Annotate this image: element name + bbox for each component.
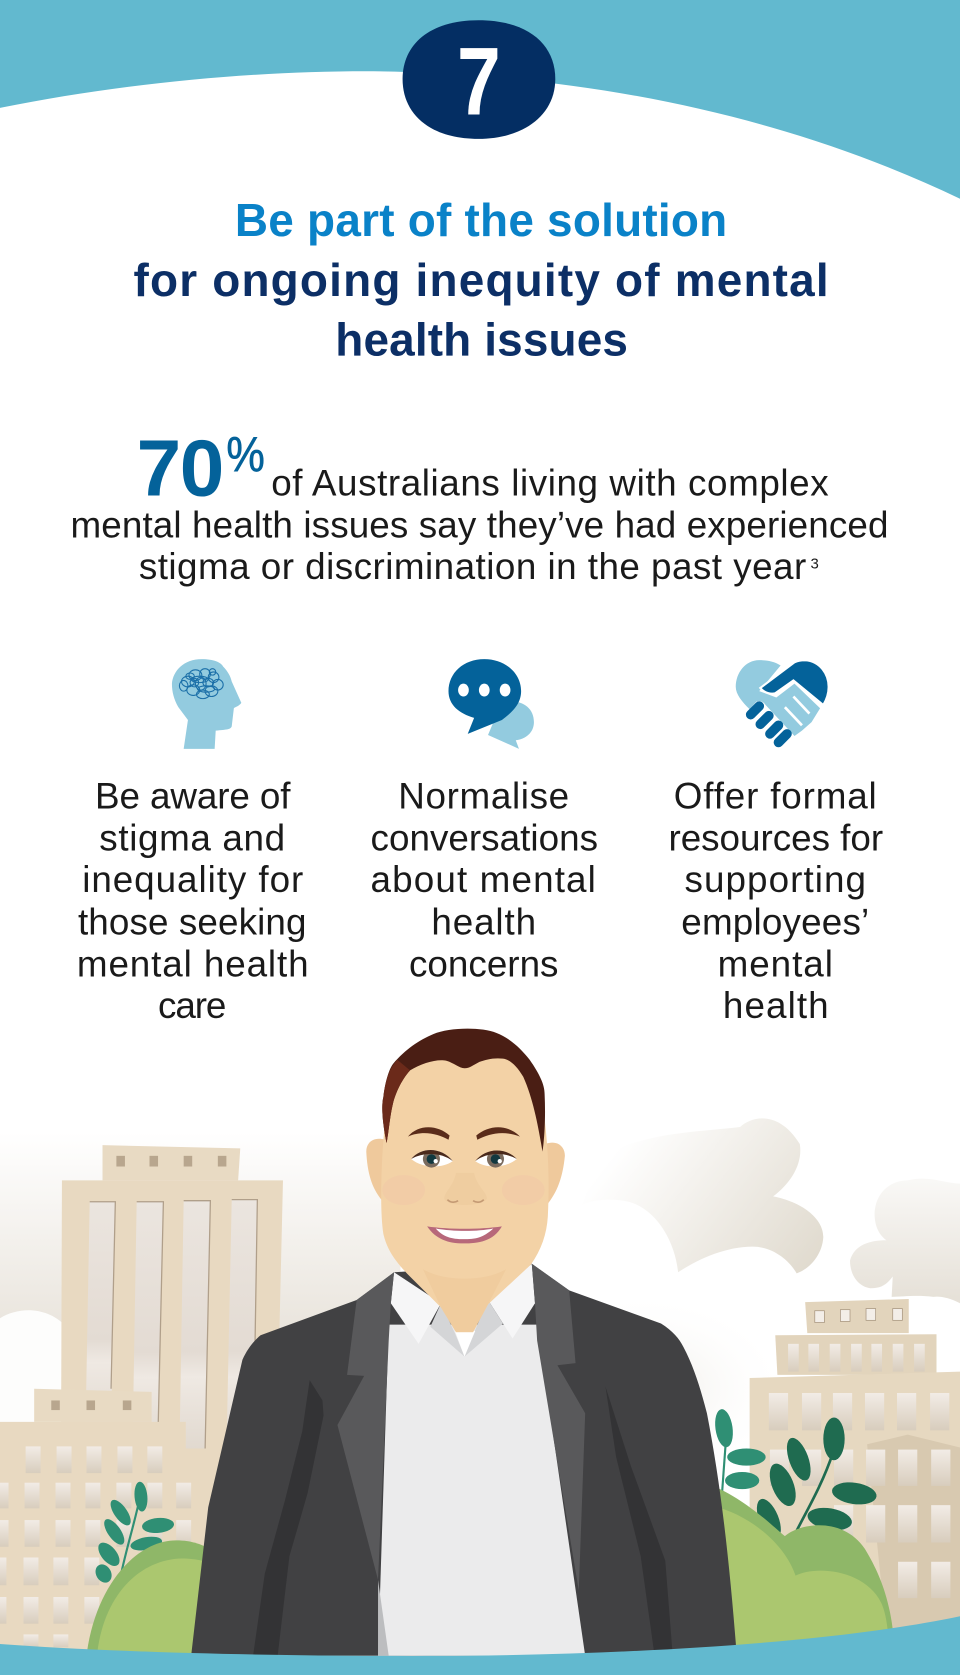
statistic: 70 percent: mental health issues say they’ve had experienced — [70, 504, 888, 545]
text: normalise conversations: Normalise — [398, 776, 569, 817]
chin shading — [423, 1269, 506, 1332]
cheek blush — [382, 1175, 425, 1205]
text: be aware of stigma: stigma and — [99, 817, 285, 858]
title: for ongoing inequity of mental — [133, 254, 829, 306]
building: tall left tower — [61, 1145, 283, 1496]
text: be aware of stigma: mental health — [77, 943, 309, 984]
top blue wave band — [0, 0, 960, 199]
collar shadow — [430, 1300, 503, 1357]
statistic: 70 percent: % — [226, 428, 265, 482]
hair — [382, 1029, 545, 1152]
text: offer formal resources: resources for — [668, 817, 883, 858]
text: be aware of stigma: those seeking — [78, 902, 306, 943]
nostrils — [447, 1200, 484, 1202]
text: normalise conversations: health — [431, 902, 536, 943]
text: normalise conversations — [371, 776, 598, 984]
eyebrows — [408, 1127, 520, 1140]
statistic: 70 percent: 70 — [137, 423, 224, 513]
statistic: 70 percent: stigma or discrimination in the past year — [139, 546, 806, 587]
shirt collar left — [391, 1272, 441, 1344]
building: right block — [750, 1299, 960, 1634]
statistic: 70 percent — [70, 423, 888, 587]
sweater — [378, 1325, 585, 1656]
right eye — [475, 1150, 517, 1168]
ears — [366, 1139, 565, 1205]
icon: speech bubbles — [448, 659, 534, 749]
shirt collar right — [488, 1264, 535, 1339]
right lapel — [532, 1264, 585, 1591]
text: be aware of stigma: care — [158, 985, 226, 1026]
face — [381, 1046, 549, 1332]
text: be aware of stigma — [77, 776, 309, 1026]
left eye — [411, 1150, 453, 1168]
statistic: 70 percent: 3 — [811, 555, 819, 572]
bottom blue wave band — [0, 1616, 960, 1675]
text: be aware of stigma: Be aware of — [95, 776, 291, 817]
icon: head with tangled brain — [172, 659, 241, 749]
sweater shade — [378, 1580, 389, 1656]
person: man in jacket — [191, 1029, 737, 1656]
nose — [444, 1173, 487, 1205]
number badge 7 — [403, 20, 555, 139]
text: offer formal resources: mental — [718, 943, 833, 984]
title — [133, 194, 829, 366]
jacket shading — [253, 1380, 673, 1656]
hair highlight — [382, 1060, 410, 1143]
left lapel — [337, 1272, 394, 1580]
bush: left — [85, 1540, 214, 1666]
neck gap — [455, 1331, 475, 1357]
plant: right leaves — [713, 1408, 878, 1542]
bush: right — [705, 1483, 895, 1666]
number badge 7: 7 — [457, 28, 501, 135]
sky and clouds backdrop — [0, 1118, 960, 1485]
title: health issues — [335, 314, 628, 366]
jacket — [191, 1264, 737, 1656]
text: be aware of stigma: inequality for — [82, 859, 303, 900]
text: offer formal resources: employees’ — [681, 902, 869, 943]
icon: handshake heart — [736, 660, 829, 742]
text: normalise conversations: about mental — [371, 859, 596, 900]
text: offer formal resources — [668, 776, 883, 1026]
plant: left leaves — [92, 1481, 175, 1586]
text: normalise conversations: conversations — [371, 817, 598, 858]
text: offer formal resources: Offer formal — [674, 776, 877, 817]
building: lower left block — [0, 1389, 218, 1666]
statistic: 70 percent: of Australians living with complex — [271, 463, 829, 504]
title: Be part of the solution — [235, 194, 727, 246]
mouth — [427, 1226, 502, 1243]
text: offer formal resources: supporting — [684, 859, 866, 900]
text: normalise conversations: concerns — [409, 943, 558, 984]
text: offer formal resources: health — [723, 985, 829, 1026]
